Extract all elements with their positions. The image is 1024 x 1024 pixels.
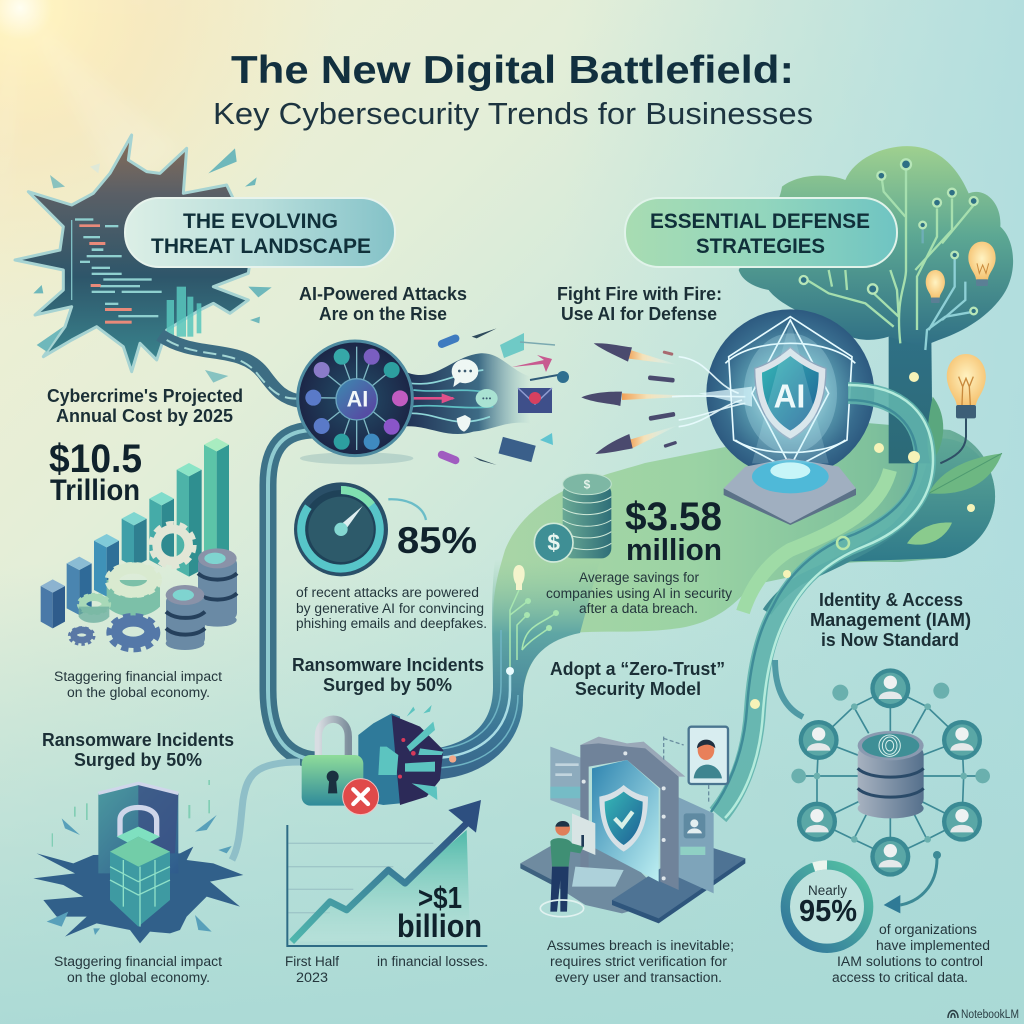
text: generative AI — [296, 585, 487, 631]
text: financial impact lower — [54, 954, 222, 985]
AI core — [298, 341, 413, 464]
tube: crack to AI core — [160, 335, 302, 402]
heading: ransomware center: Surged by 50% — [323, 675, 452, 695]
text: financial impact: Staggering financial impact — [54, 669, 222, 684]
title: The New Digital Battlefield: — [231, 49, 794, 92]
text: generative AI: by generative AI for convincing — [296, 601, 484, 616]
defense heading: ESSENTIAL DEFENSE — [650, 210, 870, 233]
error badge — [343, 779, 379, 815]
heading: IAM: Identity & Access — [819, 590, 963, 610]
stat: nearly 95%: 95% — [799, 893, 857, 928]
AI shield orb — [672, 309, 874, 525]
threat heading: THREAT LANDSCAPE — [151, 235, 371, 258]
stat: $10.5 Trillion: $10.5 — [49, 437, 142, 481]
vine across hill — [743, 470, 905, 612]
heading: IAM — [810, 590, 971, 650]
chat bubbles — [452, 359, 498, 432]
tree trunk — [889, 337, 933, 463]
cracked ground with shield building — [33, 780, 243, 943]
stat: 85%: 85% — [397, 520, 477, 561]
stat: >$1 billion — [397, 880, 482, 944]
text: IAM solutions: access to critical data. — [832, 970, 968, 985]
chart labels: 2023 — [296, 970, 328, 985]
chart labels: in financial losses. — [377, 954, 488, 969]
text: IAM solutions: of organizations — [879, 922, 977, 937]
tree canopy — [739, 146, 1013, 347]
user nodes — [797, 668, 982, 877]
illustration: cracked wall with code — [15, 135, 272, 383]
text: zero trust — [547, 938, 734, 985]
defense pill — [625, 198, 897, 267]
attack icons: envelopes, arrow, document — [499, 333, 569, 462]
AI attack stream — [402, 328, 530, 465]
rockets — [581, 343, 705, 454]
threat heading: THE EVOLVING — [183, 210, 338, 233]
bar chart and gears illustration — [41, 438, 237, 650]
heading: ransomware center — [292, 655, 484, 695]
text: IAM solutions — [832, 922, 990, 985]
lower hill band joining the lock — [425, 560, 600, 780]
AI label: AI — [347, 387, 368, 412]
text: savings — [546, 570, 732, 616]
stat: $3.58 million: $3.58 — [625, 495, 722, 539]
IAM network — [791, 668, 990, 877]
database stacks — [166, 548, 237, 650]
text: zero trust: every user and transaction. — [555, 970, 722, 985]
padlock — [318, 719, 348, 757]
heading: fight fire: Use AI for Defense — [561, 304, 717, 324]
side panels — [550, 747, 587, 813]
shield — [755, 347, 826, 439]
circuit traces — [807, 170, 974, 350]
text: financial impact lower: on the global economy. — [67, 970, 210, 985]
stat: >$1 billion: billion — [397, 908, 482, 944]
broken lock illustration — [302, 705, 456, 815]
energy beams — [672, 357, 745, 427]
zero trust gateway illustration — [520, 727, 745, 923]
subtitle: Key Cybersecurity Trends for Businesses — [213, 96, 813, 131]
stat: >$1 billion: >$1 — [418, 880, 462, 915]
burst — [358, 705, 443, 805]
glowing nodes on tubes — [750, 372, 975, 709]
stat: nearly 95%: Nearly — [808, 883, 847, 898]
heading: cybercrime cost — [47, 386, 243, 426]
chart labels — [285, 954, 488, 985]
leaves — [907, 397, 1002, 545]
title — [213, 49, 813, 131]
ribbon tubes from shield — [711, 385, 933, 818]
isometric bars — [41, 438, 229, 628]
text: financial impact — [54, 669, 222, 700]
portrait card — [689, 727, 728, 784]
floor arrows — [572, 867, 624, 887]
heading: fight fire — [557, 284, 722, 324]
text: financial impact lower: Staggering financial impact — [54, 954, 222, 969]
heading: ransomware left: Ransomware Incidents — [42, 730, 234, 750]
text: savings: after a data breach. — [579, 601, 698, 616]
person — [540, 813, 595, 917]
heading: zero trust: Adopt a “Zero-Trust” — [550, 659, 725, 679]
tree — [739, 146, 1013, 545]
hill dark lobe — [835, 438, 995, 562]
stat: $10.5 Trillion — [49, 437, 142, 507]
text: financial impact: on the global economy. — [67, 685, 210, 700]
heading: IAM: is Now Standard — [821, 630, 959, 650]
defense heading — [650, 210, 870, 258]
coin stack — [534, 473, 611, 562]
small service icons — [791, 683, 990, 843]
heading: zero trust: Security Model — [575, 679, 701, 699]
AI shield orb: AI — [774, 378, 805, 415]
crack shards — [33, 148, 272, 383]
heading: ransomware left: Surged by 50% — [74, 750, 202, 770]
stat: $3.58 million — [625, 495, 722, 567]
stat: $3.58 million: million — [626, 532, 722, 567]
text: zero trust: Assumes breach is inevitable; — [547, 938, 734, 953]
gauge — [294, 482, 426, 576]
heading: fight fire: Fight Fire with Fire: — [557, 284, 722, 304]
fingerprint database — [858, 731, 924, 818]
tube: pit to lock — [232, 762, 300, 860]
heading: IAM: Management (IAM) — [810, 610, 971, 630]
heading: zero trust — [550, 659, 725, 699]
text: generative AI: phishing emails and deepfakes. — [296, 616, 487, 631]
small bulb on hill — [513, 565, 525, 590]
95% ring — [785, 865, 869, 948]
gears — [70, 524, 193, 649]
text: generative AI: of recent attacks are powered — [296, 585, 479, 600]
text: zero trust: requires strict verification for — [550, 954, 728, 969]
holo base — [724, 458, 856, 525]
text: savings: Average savings for — [579, 570, 699, 585]
gate frame — [580, 740, 679, 890]
text: IAM solutions: IAM solutions to control — [837, 954, 983, 969]
green hill — [493, 423, 995, 690]
coin stack: $ — [547, 530, 560, 556]
arrow to ring — [884, 851, 941, 913]
text: savings: companies using AI in security — [546, 586, 732, 601]
heading: cybercrime cost: Annual Cost by 2025 — [56, 406, 233, 426]
heading: AI-powered attacks: AI-Powered Attacks — [299, 284, 467, 304]
stat: $10.5 Trillion: Trillion — [50, 474, 140, 507]
defense heading: STRATEGIES — [696, 235, 825, 258]
heading: ransomware left — [42, 730, 234, 770]
loss line chart — [287, 800, 487, 946]
threat heading — [151, 210, 371, 258]
hologram lines — [725, 317, 855, 470]
coin stack: $ — [584, 477, 591, 491]
light bulbs on tree — [926, 242, 996, 463]
heading: AI-powered attacks — [299, 284, 467, 324]
gate shield — [599, 785, 648, 852]
text: IAM solutions: have implemented — [876, 938, 990, 953]
band circuit lines — [430, 590, 559, 768]
heading: AI-powered attacks: Are on the Rise — [319, 304, 447, 324]
tube: AI core to lock — [268, 430, 315, 760]
threat pill — [125, 198, 395, 267]
heading: ransomware center: Ransomware Incidents — [292, 655, 484, 675]
heading: cybercrime cost: Cybercrime's Projected — [47, 386, 243, 406]
chart labels: First Half — [285, 954, 339, 969]
